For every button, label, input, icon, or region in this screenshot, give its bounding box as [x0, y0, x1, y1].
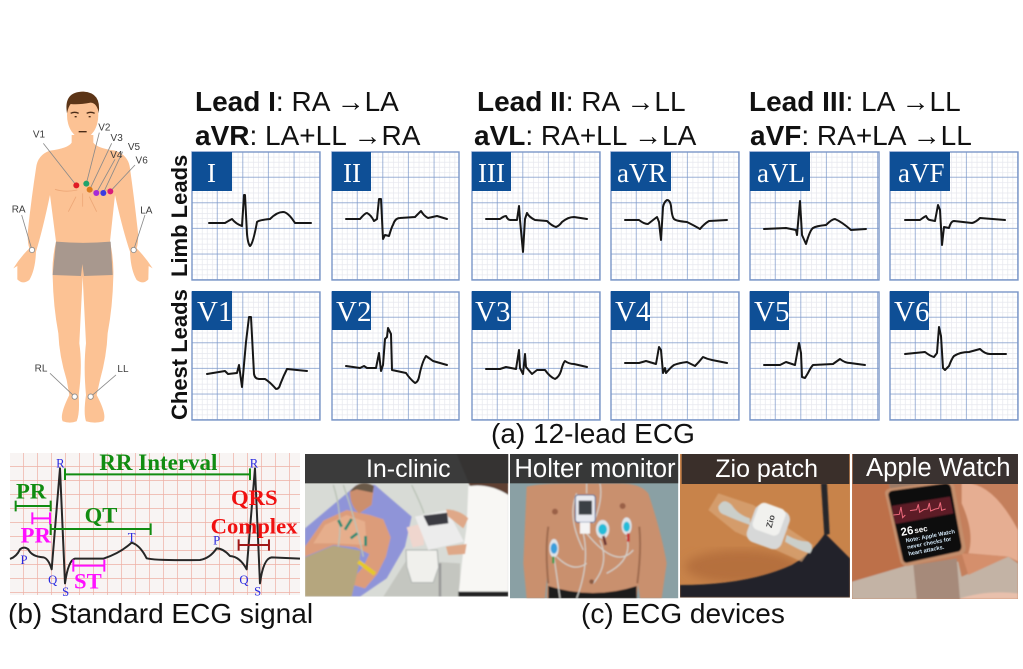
basket — [406, 550, 439, 583]
label V5: V5 — [754, 296, 789, 328]
magenta PR annotation — [21, 512, 52, 548]
label V2: V2 — [336, 296, 371, 328]
watch readout: heart attacks. — [908, 545, 945, 558]
electrode labels: LL — [117, 364, 129, 375]
device photo: Apple Watch — [852, 454, 1018, 599]
ECG panel: lead aVF — [890, 152, 1018, 280]
electrode labels: V1 — [33, 129, 46, 140]
electrode labels: RL — [35, 363, 48, 374]
watch readout: Note: Apple Watch — [905, 529, 956, 545]
Holter monitor label: Holter monitor — [514, 455, 676, 483]
electrode labels: LA — [140, 205, 153, 216]
nurse — [458, 484, 508, 597]
electrode labels: V3 — [111, 133, 123, 144]
electrode labels: V4 — [110, 150, 123, 161]
watch readout — [900, 526, 955, 556]
wave point labels: P — [213, 534, 220, 548]
electrode labels: RA — [12, 205, 26, 216]
ECG panel: lead V6 — [890, 291, 1018, 420]
label V3: V3 — [475, 296, 510, 328]
device photo: Zio patch — [680, 454, 850, 598]
ECG panel: lead V2 — [332, 291, 459, 420]
label V4: V4 — [615, 296, 651, 328]
QRS complex annotation — [211, 485, 298, 551]
photo caption bar — [853, 454, 1018, 484]
aVF definition: aVF: RA+LA →LL — [750, 120, 972, 151]
Zio patch label: Zio patch — [715, 455, 818, 483]
ECG panel: lead aVL — [750, 152, 879, 280]
photo caption bar — [305, 454, 508, 483]
ECG panel: lead III — [472, 152, 600, 280]
limb electrodes — [29, 247, 136, 399]
man head — [350, 483, 374, 513]
Lead III definition: Lead III: LA →LL — [749, 86, 961, 117]
label aVL: aVL — [757, 158, 805, 188]
chest electrodes — [73, 181, 113, 196]
wave point labels: P — [20, 553, 28, 567]
ECG panel: lead I — [192, 152, 320, 280]
ECG panel: lead V3 — [472, 291, 600, 420]
chest lines — [55, 189, 110, 212]
wave point labels: T — [128, 531, 136, 545]
face — [71, 112, 95, 132]
man torso and arms — [305, 510, 391, 588]
wave point labels: Q — [239, 573, 249, 587]
ECG panel: lead II — [332, 152, 459, 280]
caption (a): (a) 12-lead ECG — [491, 418, 695, 449]
ECG panel: lead V4 — [611, 291, 739, 420]
label aVR: aVR — [617, 158, 666, 188]
floor and bed — [383, 560, 460, 597]
Zio device text: Zio — [764, 514, 777, 529]
ST annotation: ST — [74, 568, 102, 593]
photo caption bar — [682, 454, 849, 484]
wave point labels: S — [62, 585, 69, 599]
RR interval annotation — [65, 450, 250, 480]
aVR definition: aVR: LA+LL →RA — [195, 120, 421, 151]
watch readout: never checks for — [907, 536, 953, 551]
caption (c): (c) ECG devices — [581, 598, 785, 629]
body silhouette — [13, 135, 153, 423]
Lead I definition: Lead I: RA →LA — [195, 86, 399, 117]
electrode labels: V5 — [128, 142, 141, 153]
ECG panel: lead V1 — [192, 291, 320, 420]
Apple Watch label: Apple Watch — [866, 454, 1011, 482]
QRS complex annotation: Complex — [211, 513, 298, 538]
electrode labels: V2 — [98, 123, 111, 134]
QT annotation: QT — [85, 503, 117, 528]
hair — [66, 92, 99, 113]
caption (b): (b) Standard ECG signal — [8, 598, 313, 629]
Limb Leads axis label: Limb Leads — [167, 155, 192, 277]
wave point labels: Q — [48, 573, 57, 587]
watch ECG trace — [893, 502, 946, 518]
pants — [305, 546, 361, 597]
label V1: V1 — [197, 296, 232, 328]
electrode labels — [12, 123, 153, 375]
wave point labels: R — [56, 456, 65, 470]
ST annotation — [73, 560, 104, 593]
wave point labels — [20, 456, 261, 599]
green PR annotation — [16, 478, 51, 511]
aVL definition: aVL: RA+LL →LA — [474, 120, 697, 151]
Lead II definition: Lead II: RA →LL — [477, 86, 686, 117]
label III: III — [478, 158, 505, 188]
ECG waveform — [10, 468, 300, 583]
wave point labels: S — [254, 584, 261, 598]
green PR annotation: PR — [16, 478, 47, 503]
device photo: Holter monitor — [510, 454, 678, 598]
body diagram with electrodes — [12, 92, 153, 423]
label V6: V6 — [894, 296, 929, 328]
Chest Leads axis label: Chest Leads — [167, 289, 192, 420]
ECG panel: lead V5 — [750, 291, 879, 420]
label I: I — [207, 158, 216, 188]
ECG panel: lead aVR — [611, 152, 739, 280]
underwear — [53, 242, 113, 276]
standard ECG signal chart — [10, 450, 300, 599]
electrode leader lines — [22, 133, 145, 397]
QRS complex annotation: QRS — [231, 485, 278, 510]
wave point labels: R — [250, 456, 259, 470]
label aVF: aVF — [898, 158, 944, 188]
RR interval annotation: RR Interval — [99, 450, 217, 475]
head — [67, 92, 98, 138]
label II: II — [343, 158, 361, 188]
leads — [333, 485, 424, 557]
QT annotation — [51, 503, 151, 535]
watch readout: 26sec — [900, 522, 929, 539]
magenta PR annotation: PR — [21, 523, 52, 548]
photo caption bar — [510, 454, 678, 483]
device photo: in-clinic — [305, 454, 508, 597]
ECG machine — [407, 523, 424, 547]
In-clinic label: In-clinic — [366, 455, 451, 483]
lead definitions — [195, 86, 972, 151]
electrode labels: V6 — [136, 155, 148, 166]
